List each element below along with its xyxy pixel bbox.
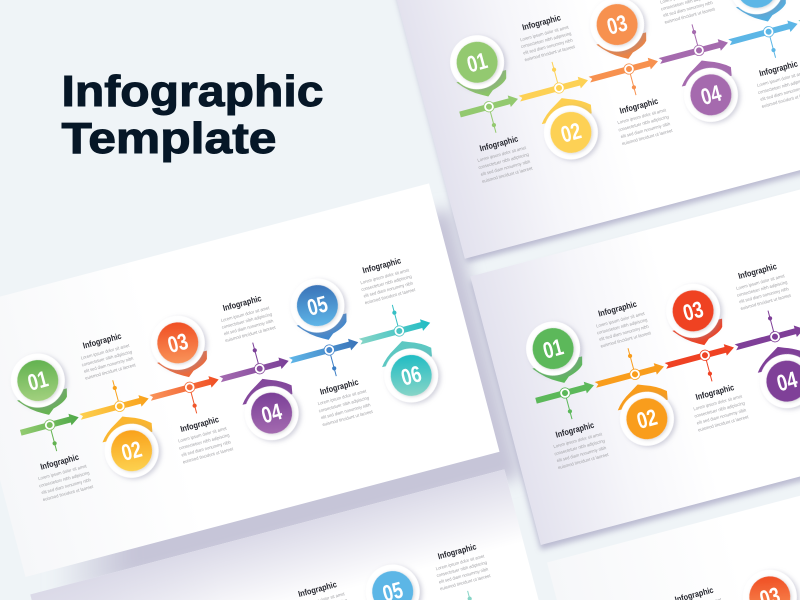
main slide cast shadow [0,208,522,600]
step 01 [441,28,537,185]
text 03: consectetuer nibh adipiscing [178,432,230,451]
step 03: 03 [604,9,630,40]
step 06 text: Infographic [437,541,478,561]
badge 04: 04 [259,398,285,428]
step 02: Infographic [597,299,638,319]
step 02: consectetuer nibh adipiscing [520,31,572,49]
title [62,67,324,163]
step 04 [641,0,747,132]
text 03: euismod tincidunt ut laoreet [182,446,234,465]
pointer 04 [237,372,294,407]
text 04 [216,291,277,343]
text 06: Infographic [361,255,402,275]
text 02: euismod tincidunt ut laoreet [85,362,137,381]
step 01: Infographic [478,133,519,153]
step 04 [201,290,308,450]
step 02: elit sed diam nonummy nibh [523,37,574,56]
step 02 [577,296,683,455]
pointer 02 [97,410,154,445]
stem 04 [251,342,262,369]
text 06: euismod tincidunt ut laoreet [364,287,416,305]
step 03: Lorem ipsum dolor sit amet [617,107,667,125]
text 04: euismod tincidunt ut laoreet [225,325,277,343]
step 02 [501,10,607,169]
arrow 06 [358,317,432,347]
step 02: elit sed diam nonummy nibh [599,324,650,342]
text 05: elit sed diam nonummy nibh [320,402,371,420]
badge 01 [5,347,71,414]
step 01: elit sed diam nonummy nibh [480,159,531,177]
step 03: elit sed diam nonummy nibh [696,407,747,426]
step 03 [647,277,753,436]
step 02: Lorem ipsum dolor sit amet [596,311,646,329]
step 01: consectetuer nibh adipiscing [478,152,530,170]
step 01 [2,347,98,503]
arrow 05 [288,336,360,366]
text 02 [76,329,137,381]
step 04: euismod tincidunt ut laoreet [664,6,716,25]
title: Template [62,114,276,163]
step 04 [717,258,800,418]
step 03: Infographic [694,382,735,402]
step 04: Infographic [737,261,778,281]
text 01: Infographic [39,452,80,472]
stem 02 [111,380,122,407]
pointer 01 [17,387,72,422]
step 03 [571,0,677,150]
stem 05 [327,349,338,377]
step 01: euismod tincidunt ut laoreet [557,452,610,470]
step 02: consectetuer nibh adipiscing [596,317,648,335]
step 04 text: Infographic [297,579,338,599]
badge 05 [284,272,350,339]
step 05 badge [360,558,426,600]
step 03: consectetuer nibh adipiscing [618,114,670,132]
node 03 [183,381,196,394]
step 02: euismod tincidunt ut laoreet [524,44,576,62]
step 01: 01 [540,333,566,364]
badge 06 [378,342,444,409]
badge 02 [99,418,165,484]
step 06 text [431,540,500,600]
step 02: 02 [558,117,584,148]
step 06 arrow [797,0,800,29]
slide: top right pastel timeline [394,0,800,263]
step 06 text: Lorem ipsum dolor sit amet [435,553,485,571]
text 04: elit sed diam nonummy nibh [223,318,274,336]
step 01: 01 [464,47,490,77]
text 03: Infographic [179,414,220,434]
step 02: 02 [634,404,660,434]
badge 05: 05 [304,290,331,321]
step 05 [710,0,800,113]
text 06 [355,254,416,305]
step 04: 04 [698,80,724,110]
text 02: consectetuer nibh adipiscing [81,349,133,367]
arrow 03 [149,374,220,404]
slide: main timeline [0,183,500,577]
text 05: Infographic [319,377,360,397]
pointer 05 [297,312,352,347]
step 03: consectetuer nibh adipiscing [694,400,746,419]
text 01: elit sed diam nonummy nibh [41,477,92,495]
step 01: Lorem ipsum dolor sit amet [477,145,527,163]
pointer 06 [377,334,433,370]
step 02 [61,328,168,487]
node 01 [43,419,56,431]
slide: bottom right timeline [547,437,800,600]
step 03: Infographic [618,96,659,116]
step 01: Infographic [554,420,595,440]
stem 06 [390,304,401,332]
text 04: Lorem ipsum dolor sit amet [220,305,270,323]
step 01: euismod tincidunt ut laoreet [481,165,534,184]
step 03: elit sed diam nonummy nibh [620,121,671,139]
badge 06: 06 [398,360,424,391]
node 02 [113,400,126,413]
text 04: Infographic [222,293,263,313]
text 06: elit sed diam nonummy nibh [363,280,414,299]
text 01: Lorem ipsum dolor sit amet [38,463,88,481]
step 01: consectetuer nibh adipiscing [554,438,606,456]
stem 01 [48,424,59,452]
step 04: elit sed diam nonummy nibh [739,286,790,304]
step 01: elit sed diam nonummy nibh [556,445,607,463]
step 02: euismod tincidunt ut laoreet [600,330,652,349]
step 06 [341,252,449,412]
badge 02: 02 [119,436,145,466]
slide: bottom centre timeline [30,469,575,600]
step 04: Lorem ipsum dolor sit amet [736,273,786,291]
text 05: consectetuer nibh adipiscing [318,395,370,413]
step 03 [131,309,238,468]
step 06 text: euismod tincidunt ut laoreet [440,573,492,591]
step 01: Lorem ipsum dolor sit amet [553,431,603,449]
text 06: Lorem ipsum dolor sit amet [360,267,410,285]
text 04: consectetuer nibh adipiscing [221,311,273,330]
badge 01: 01 [25,365,51,396]
step 05 [271,272,377,431]
step 03: euismod tincidunt ut laoreet [697,414,750,433]
text 03: Lorem ipsum dolor sit amet [178,426,228,444]
pointer 03 [157,350,212,384]
arrow 04 [219,355,290,385]
text 06: consectetuer nibh adipiscing [361,274,413,292]
node 06 [393,325,406,337]
node 04 [253,362,266,375]
stem 03 [188,387,199,414]
step 03: 03 [680,296,706,326]
step 04: euismod tincidunt ut laoreet [740,293,792,311]
text 05: euismod tincidunt ut laoreet [322,409,374,427]
step 03: Lorem ipsum dolor sit amet [693,394,743,412]
text 05 [313,375,374,427]
text 01: euismod tincidunt ut laoreet [42,484,94,502]
text 03 [173,412,234,465]
text 01 [33,450,94,502]
text 03: elit sed diam nonummy nibh [181,439,232,458]
step 02: Lorem ipsum dolor sit amet [520,24,570,42]
text 02: Lorem ipsum dolor sit amet [80,343,130,361]
badge 04 [239,380,305,446]
step 04: consectetuer nibh adipiscing [736,279,788,298]
step 06 text: elit sed diam nonummy nibh [438,566,489,585]
step 01 [517,315,613,471]
arrow 02 [79,393,150,423]
step 02: Infographic [521,12,562,32]
text 02: elit sed diam nonummy nibh [83,356,134,374]
text 02: Infographic [82,331,123,351]
badge 03 [145,310,211,376]
slide: middle right vivid timeline [470,151,800,550]
title: Infographic [62,67,324,116]
arrow 01 [19,411,80,439]
step 03 badge [737,564,800,600]
text 05: Lorem ipsum dolor sit amet [317,388,367,406]
text 01: consectetuer nibh adipiscing [38,470,90,488]
badge 03: 03 [165,328,191,358]
step 06 text: consectetuer nibh adipiscing [436,560,488,578]
node 05 [323,344,336,356]
step 03: euismod tincidunt ut laoreet [621,128,674,146]
